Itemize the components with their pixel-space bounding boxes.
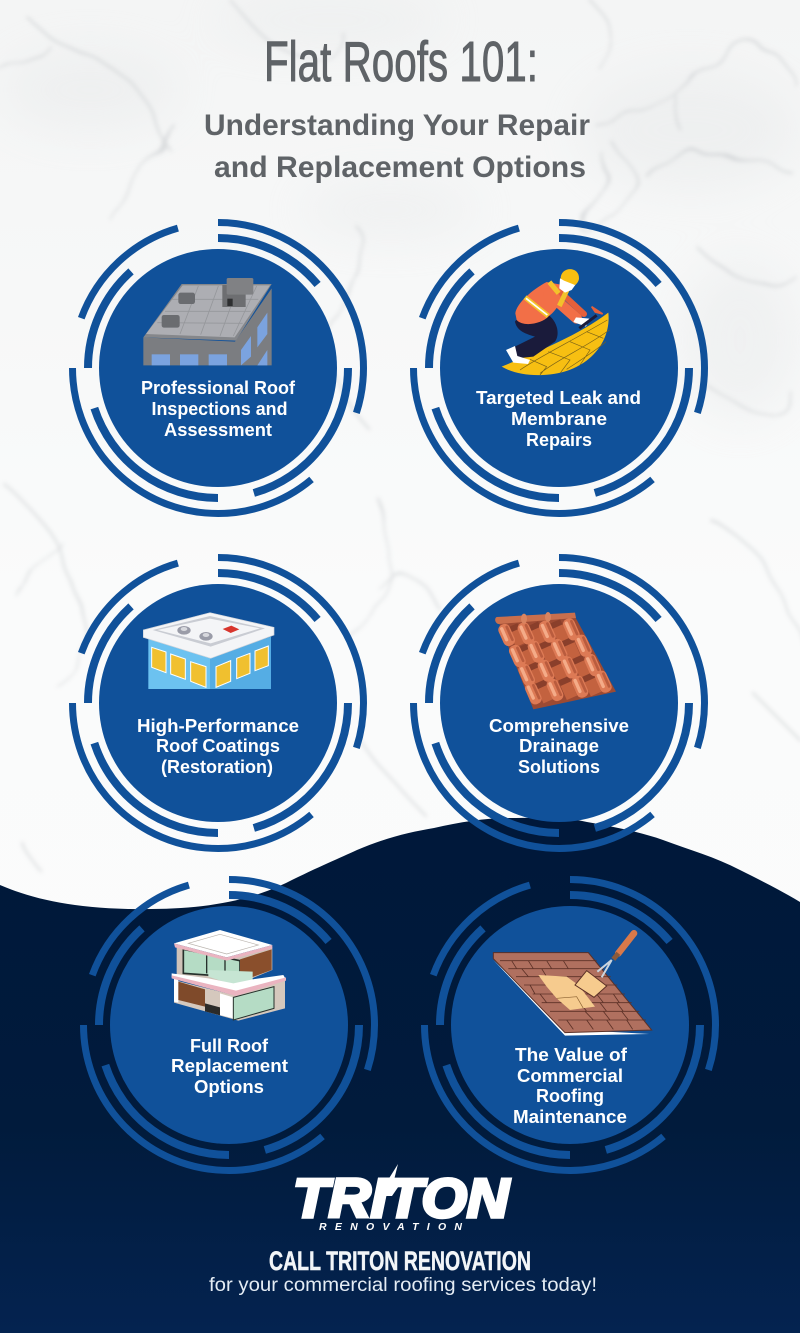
- label: (Restoration): [161, 756, 273, 777]
- subtitle: and Replacement Options: [214, 151, 586, 184]
- label: The Value of: [515, 1044, 628, 1065]
- label: [137, 715, 299, 777]
- label: Assessment: [164, 419, 272, 440]
- subtitle: [204, 109, 591, 184]
- call to action heading: CALL TRITON RENOVATION: [269, 1246, 531, 1276]
- ring badge: [24, 820, 434, 1230]
- icon: flat roof building: [143, 278, 272, 365]
- ring badge: [13, 498, 423, 908]
- label: High-Performance: [137, 715, 299, 736]
- call to action subtext: for your commercial roofing services today!: [209, 1275, 597, 1296]
- subtitle: Understanding Your Repair: [204, 109, 591, 142]
- label: Roofing: [536, 1085, 604, 1106]
- icon: shingle roof patch with brush: [493, 933, 652, 1036]
- label: Inspections and: [152, 398, 288, 419]
- panel: high-performance roof coatings: [13, 498, 423, 908]
- label: Drainage: [519, 735, 599, 756]
- label: Membrane: [511, 408, 607, 429]
- panel: professional roof inspections: [13, 163, 423, 573]
- panel: targeted leak and membrane repairs: [354, 163, 764, 573]
- label: [171, 1035, 288, 1097]
- icon: two-storey flat roof house: [172, 930, 286, 1021]
- label: [141, 377, 296, 440]
- label: [476, 387, 641, 450]
- ring badge: [354, 163, 764, 573]
- label: Targeted Leak and: [476, 387, 641, 408]
- label: Commercial: [517, 1065, 623, 1086]
- logo bolt: [380, 1164, 403, 1196]
- label: [513, 1044, 628, 1127]
- icon: clay roof tiles: [495, 612, 616, 709]
- label: Maintenance: [513, 1106, 627, 1127]
- title: Flat Roofs 101:: [264, 30, 538, 94]
- label: Replacement: [171, 1055, 288, 1076]
- panel: comprehensive drainage solutions: [354, 498, 764, 908]
- label: Options: [194, 1076, 264, 1097]
- icon: roofer on tiles: [502, 269, 609, 375]
- label: Comprehensive: [489, 715, 629, 736]
- label: Repairs: [526, 429, 592, 450]
- ring badge: [13, 163, 423, 573]
- ring badge: [365, 820, 775, 1230]
- icon: coated flat roof building: [143, 613, 274, 689]
- logo: Triton Renovation: TRITON: [293, 1167, 510, 1229]
- dark navy wave section: [0, 818, 800, 1333]
- label: Roof Coatings: [156, 735, 280, 756]
- label: [489, 715, 629, 777]
- panel: full roof replacement options: [24, 820, 434, 1230]
- panel: value of commercial roofing maintenance: [365, 820, 775, 1230]
- label: Professional Roof: [141, 377, 296, 398]
- ring badge: [354, 498, 764, 908]
- label: Full Roof: [190, 1035, 269, 1056]
- logo: Triton Renovation: RENOVATION: [319, 1221, 462, 1233]
- label: Solutions: [518, 756, 600, 777]
